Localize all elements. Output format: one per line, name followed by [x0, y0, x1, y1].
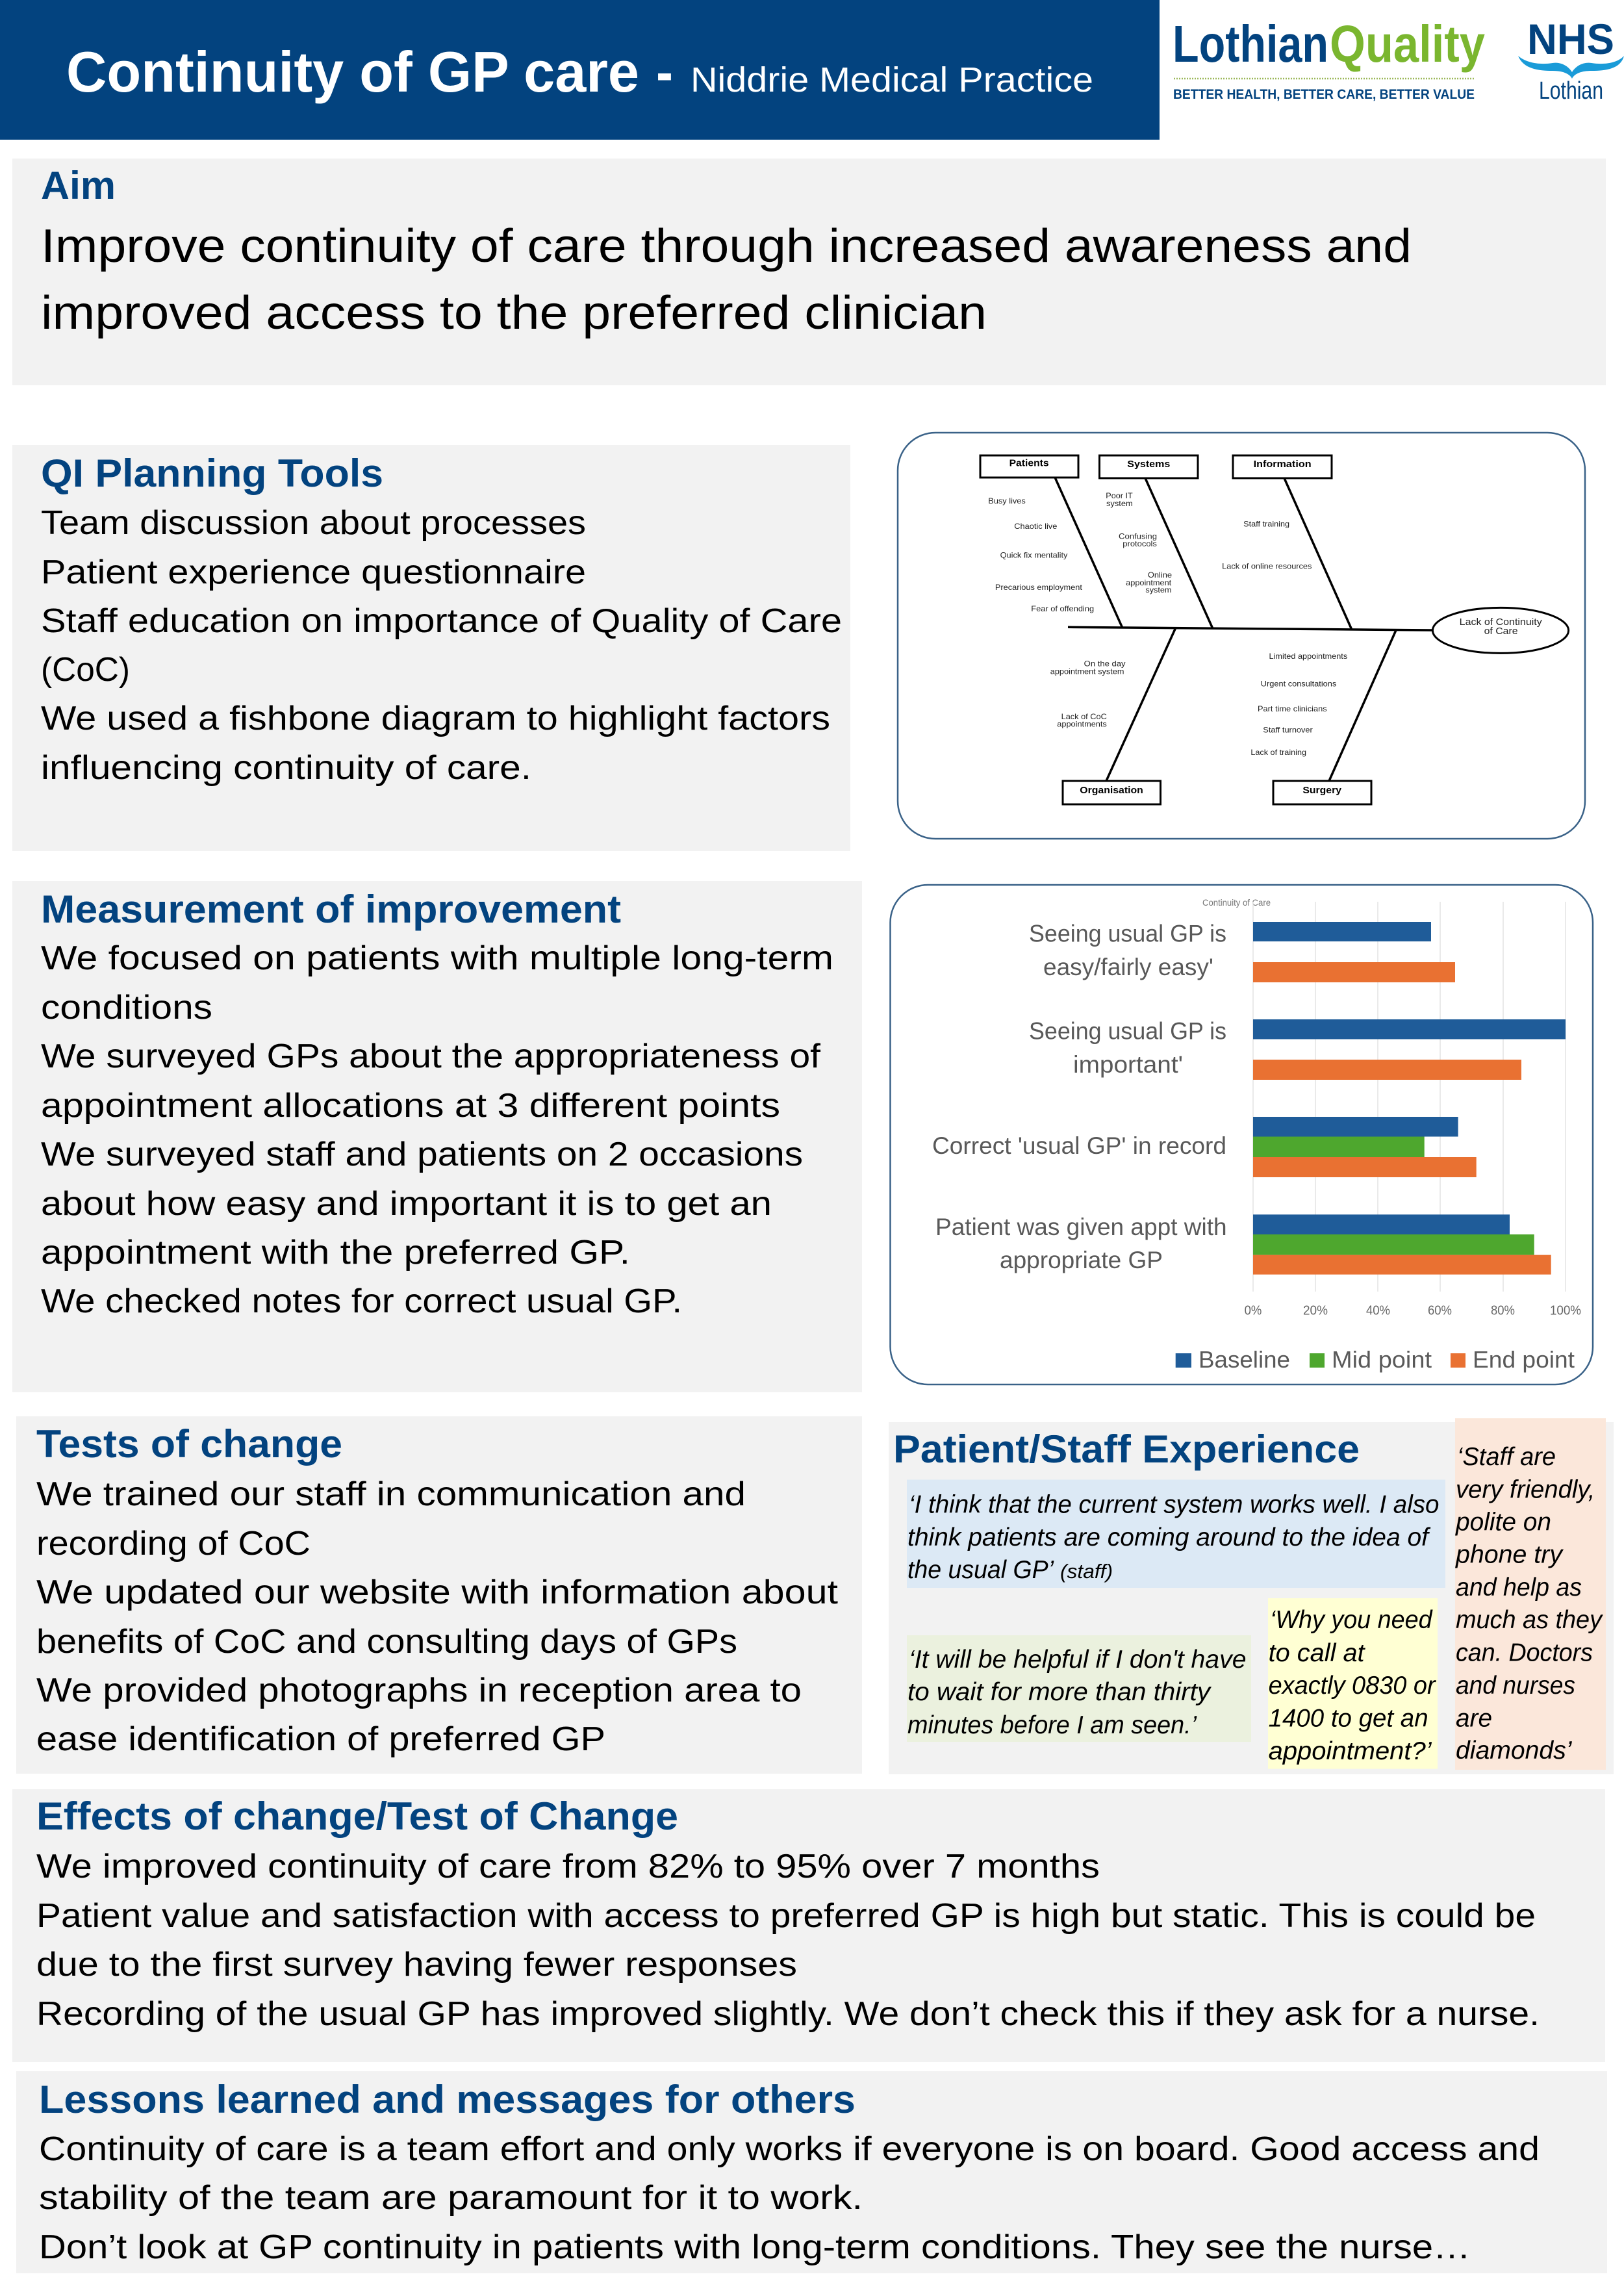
logo: NHS Lothian — [1518, 15, 1624, 105]
subtitle: Niddrie Medical Practice — [691, 60, 1093, 99]
category labels: Seeing usual GP is — [1029, 1017, 1226, 1045]
x axis labels: 100% — [1550, 1303, 1581, 1318]
text: tests of change: We updated our website with information about — [36, 1574, 839, 1611]
quote: staff are very friendly — [1455, 1418, 1606, 1770]
fishbone factor labels: Busy lives — [988, 496, 1026, 505]
bars: seeing usual GP is important — [1253, 1019, 1566, 1080]
text: measurement of improvement: conditions — [41, 989, 212, 1027]
logo: NHS Lothian: NHS — [1527, 15, 1614, 63]
text: effects of change: Patient value and satisfaction with access to preferred GP is high but static. This is could be — [36, 1897, 1536, 1935]
text: QI planning tools: influencing continuity of care. — [41, 749, 531, 787]
text: effects of change — [36, 1848, 1540, 2033]
panel: tests of change — [16, 1416, 862, 1774]
text: tests of change: recording of CoC — [36, 1525, 311, 1563]
category box: Systems: Systems — [1127, 459, 1170, 470]
fishbone factor labels: system — [1106, 499, 1133, 508]
text: tests of change — [36, 1475, 839, 1758]
fishbone factor labels: Lack of online resources — [1222, 562, 1312, 571]
category labels: important' — [1073, 1051, 1183, 1078]
quote: current system works well: think patients are coming around to the idea of — [907, 1524, 1431, 1551]
effect ellipse: lack of continuity of care: Lack of Continuity — [1460, 617, 1542, 628]
text: measurement of improvement — [41, 939, 833, 1320]
bars: patient given appt with appropriate GP — [1253, 1214, 1551, 1275]
fishbone factor labels: Fear of offending — [1031, 604, 1094, 613]
panel: fishbone diagram — [898, 433, 1585, 839]
category box: Organisation: Organisation — [1080, 785, 1143, 796]
quote: staff are very friendly: polite on — [1455, 1509, 1551, 1537]
quote: staff are very friendly: diamonds’ — [1456, 1737, 1573, 1765]
fishbone factor labels: Confusing — [1119, 531, 1157, 541]
category labels: Patient was given appt with — [935, 1214, 1227, 1240]
fishbone factor labels: Part time clinicians — [1258, 704, 1327, 713]
title: Continuity of GP care — [66, 40, 639, 104]
text: measurement of improvement: appointment allocations at 3 different points — [41, 1087, 780, 1125]
logo: Lothian Quality: Quality — [1330, 15, 1485, 73]
fishbone factor labels: Limited appointments — [1269, 652, 1347, 661]
panel: QI planning tools — [12, 445, 850, 851]
fishbone factor labels: Urgent consultations — [1261, 680, 1336, 689]
quote: staff are very friendly: are — [1456, 1705, 1492, 1732]
fishbone factor labels: Lack of training — [1250, 748, 1306, 757]
quote: waiting more than thirty minutes: ‘It will be helpful if I don't have — [909, 1646, 1246, 1674]
quote: why call at exactly 0830 — [1268, 1598, 1438, 1769]
text: measurement of improvement: We focused on patients with multiple long-term — [41, 939, 833, 977]
quote: current system works well: (staff) — [1060, 1560, 1113, 1583]
x axis labels: 80% — [1491, 1303, 1515, 1318]
x axis labels: 60% — [1428, 1303, 1452, 1318]
aim statement: improved access to the preferred clinician — [41, 287, 987, 339]
bars: correct usual GP in record — [1253, 1117, 1477, 1177]
panel: continuity of care bar chart — [890, 885, 1593, 1384]
category labels: appropriate GP — [1000, 1247, 1163, 1273]
legend: Baseline — [1199, 1346, 1290, 1373]
quote: waiting more than thirty minutes: to wait for more than thirty — [907, 1678, 1212, 1706]
text: measurement of improvement: appointment with the preferred GP. — [41, 1234, 630, 1271]
text: measurement of improvement: We surveyed GPs about the appropriateness of — [41, 1038, 821, 1075]
fishbone factor labels: system — [1145, 585, 1171, 594]
text: tests of change: benefits of CoC and consulting days of GPs — [36, 1623, 737, 1661]
fishbone factor labels: Online — [1148, 570, 1172, 580]
quote: staff are very friendly: and nurses — [1456, 1672, 1575, 1700]
text: tests of change: We trained our staff in communication and — [36, 1475, 746, 1513]
fishbone factor labels: appointment system — [1050, 667, 1124, 676]
category box: Surgery — [1273, 781, 1371, 804]
quote: staff are very friendly: very friendly, — [1456, 1475, 1595, 1503]
quote: waiting more than thirty minutes: minutes before I am seen.’ — [907, 1711, 1197, 1739]
text: effects of change: We improved continuity of care from 82% to 95% over 7 months — [36, 1848, 1100, 1885]
panel: patient/staff experience — [889, 1418, 1614, 1774]
aim statement: Improve continuity of care through increased awareness and — [41, 220, 1412, 272]
quote: why call at exactly 0830: appointment?’ — [1269, 1737, 1432, 1765]
quote: staff are very friendly: ‘Staff are — [1457, 1443, 1556, 1471]
quote: why call at exactly 0830: ‘Why you need — [1270, 1606, 1433, 1634]
legend: End point — [1473, 1346, 1575, 1373]
fishbone factor labels: Precarious employment — [995, 583, 1083, 592]
quote: staff are very friendly: phone try — [1455, 1541, 1564, 1569]
logo: NHS Lothian: Lothian — [1539, 77, 1603, 105]
heading: QI planning tools: QI Planning Tools — [41, 452, 383, 495]
legend — [1176, 1346, 1575, 1373]
fishbone factor labels: Poor IT — [1106, 491, 1133, 500]
heading: tests of change: Tests of change — [36, 1422, 342, 1466]
heading: effects of change: Effects of change/Test of Change — [36, 1794, 678, 1838]
text: tests of change: We provided photographs in reception area to — [36, 1672, 802, 1709]
text: QI planning tools: Team discussion about processes — [41, 504, 586, 542]
text: QI planning tools: (CoC) — [41, 651, 130, 689]
text: QI planning tools — [41, 504, 842, 787]
panel: effects of change — [12, 1789, 1605, 2062]
text: measurement of improvement: We surveyed staff and patients on 2 occasions — [41, 1136, 803, 1173]
panel: aim — [12, 159, 1606, 385]
chart title: Continuity of Care — [1202, 897, 1271, 908]
category box: Surgery: Surgery — [1302, 785, 1342, 796]
text: measurement of improvement: about how easy and important it is to get an — [41, 1185, 772, 1223]
effect ellipse: lack of continuity of care: of Care — [1484, 626, 1518, 637]
x axis labels: 20% — [1303, 1303, 1328, 1318]
logo: Lothian Quality: BETTER HEALTH, BETTER CARE, BETTER VALUE — [1173, 87, 1475, 102]
fishbone factor labels: Chaotic live — [1014, 522, 1058, 531]
category labels: easy/fairly easy' — [1043, 954, 1213, 980]
text: QI planning tools: We used a fishbone diagram to highlight factors — [41, 700, 830, 737]
text: lessons learned: stability of the team are paramount for it to work. — [39, 2179, 863, 2217]
fishbone factor labels: Staff training — [1243, 519, 1289, 528]
x axis labels — [1245, 1303, 1581, 1318]
title dash: - — [656, 40, 673, 104]
quote: staff are very friendly: can. Doctors — [1456, 1639, 1593, 1667]
text: measurement of improvement: We checked notes for correct usual GP. — [41, 1282, 682, 1320]
logo: Lothian Quality — [1173, 15, 1485, 102]
panel: measurement of improvement — [12, 881, 862, 1392]
text: QI planning tools: Staff education on importance of Quality of Care — [41, 602, 842, 640]
quote: current system works well: the usual GP’ — [907, 1556, 1054, 1584]
category box: Patients: Patients — [1009, 457, 1049, 468]
quote: why call at exactly 0830: to call at — [1269, 1639, 1366, 1667]
fishbone factor labels: On the day — [1084, 659, 1125, 668]
category labels: Correct 'usual GP' in record — [932, 1132, 1226, 1159]
fishbone factor labels: Staff turnover — [1263, 725, 1313, 734]
fishbone bones — [1055, 478, 1432, 783]
category box: Systems — [1099, 455, 1198, 478]
text: lessons learned: Continuity of care is a team effort and only works if everyone is on board. Good access and — [39, 2130, 1540, 2168]
fishbone factor labels — [988, 491, 1347, 757]
bars: seeing usual GP is easy — [1253, 922, 1455, 982]
category box: Organisation — [1063, 781, 1160, 804]
legend: Mid point — [1332, 1346, 1432, 1373]
quote: why call at exactly 0830: exactly 0830 or — [1269, 1672, 1437, 1700]
category box: Information — [1233, 455, 1332, 478]
heading: aim: Aim — [41, 164, 116, 207]
effect ellipse: lack of continuity of care — [1432, 607, 1569, 653]
x axis labels: 40% — [1366, 1303, 1390, 1318]
category labels — [932, 920, 1227, 1273]
text: effects of change: due to the first survey having fewer responses — [36, 1946, 797, 1983]
fishbone factor labels: appointments — [1057, 720, 1107, 729]
text: QI planning tools: Patient experience questionnaire — [41, 554, 586, 591]
x axis labels: 0% — [1245, 1303, 1262, 1318]
heading: patient/staff experience: Patient/Staff Experience — [893, 1427, 1360, 1471]
logo: Lothian Quality: Lothian — [1173, 15, 1328, 73]
quote: current system works well: ‘I think that the current system works well. I also — [909, 1490, 1440, 1518]
quote: staff are very friendly: and help as — [1456, 1574, 1582, 1601]
quote: why call at exactly 0830: 1400 to get an — [1269, 1705, 1428, 1732]
quote: current system works well — [907, 1480, 1445, 1588]
text: lessons learned: Don’t look at GP continuity in patients with long-term conditions. They see the nurse… — [39, 2228, 1471, 2266]
panel: lessons learned — [16, 2071, 1607, 2273]
fishbone factor labels: Quick fix mentality — [1000, 550, 1067, 559]
quote: waiting more than thirty minutes — [907, 1635, 1251, 1742]
fishbone factor labels: protocols — [1123, 539, 1157, 548]
text: effects of change: Recording of the usual GP has improved slightly. We don’t check this if they ask for a nurse. — [36, 1995, 1540, 2033]
category box: Patients — [980, 455, 1078, 478]
text: tests of change: ease identification of preferred GP — [36, 1720, 605, 1758]
fishbone factor labels: Lack of CoC — [1061, 712, 1107, 721]
quote: staff are very friendly: much as they — [1456, 1606, 1603, 1634]
category labels: Seeing usual GP is — [1029, 920, 1226, 947]
category box: Information: Information — [1254, 459, 1312, 470]
heading: lessons learned: Lessons learned and messages for others — [39, 2078, 856, 2121]
text: lessons learned — [39, 2130, 1540, 2266]
aim statement — [41, 220, 1412, 339]
title banner — [0, 0, 1160, 140]
fishbone factor labels: appointment — [1126, 578, 1172, 587]
heading: measurement of improvement: Measurement of improvement — [41, 887, 621, 931]
